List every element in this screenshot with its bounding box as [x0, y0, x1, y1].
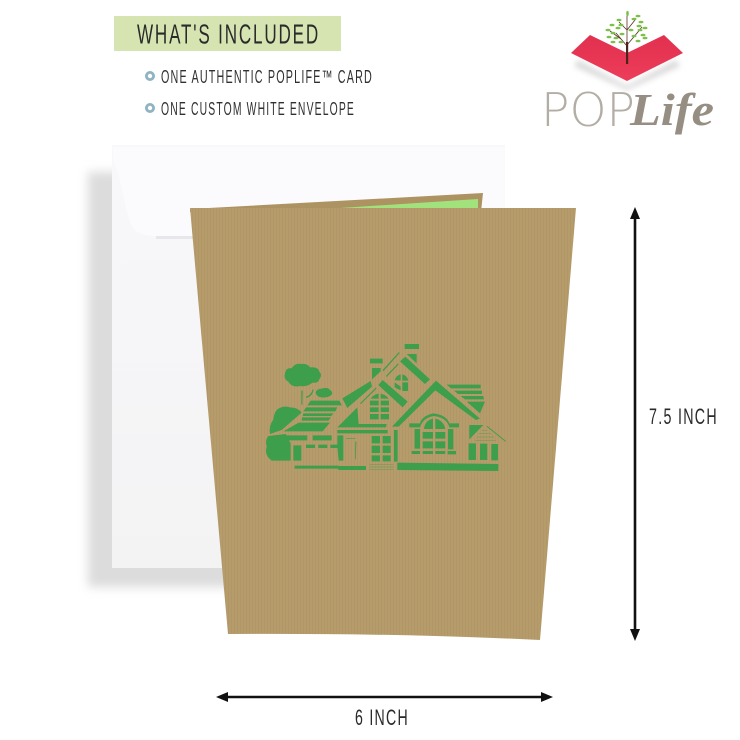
- porch post and foundation: [394, 430, 498, 471]
- logo shadow: [574, 60, 680, 90]
- left roof: [283, 401, 342, 431]
- dimension arrow: height: [630, 207, 640, 641]
- card front: [190, 208, 576, 640]
- envelope flap: [113, 147, 505, 236]
- logo wordmark: POP: POP: [541, 83, 635, 137]
- card green insert: [340, 199, 478, 209]
- chimneys: [370, 344, 419, 379]
- greeting card: [190, 193, 576, 640]
- logo wordmark: Life: Life: [629, 84, 714, 135]
- door: [346, 438, 356, 459]
- gable window: [370, 394, 389, 419]
- heading: what's included: [114, 16, 341, 51]
- item: card: ONE AUTHENTIC POPLIFE™ CARD: [161, 67, 373, 87]
- envelope shadow: [88, 172, 378, 587]
- list of included items: [146, 67, 373, 119]
- right roof stripes: [447, 385, 485, 413]
- house cut-out: [266, 344, 506, 471]
- tree and bush: [285, 364, 321, 386]
- attic window: [395, 374, 408, 391]
- arched window: [409, 413, 459, 427]
- porch roof: [337, 407, 388, 433]
- logo: red book: [571, 35, 683, 81]
- dimension label: width: 6 INCH: [355, 705, 409, 730]
- logo: tree: [606, 11, 648, 64]
- envelope body: [112, 145, 505, 568]
- roof bands: [342, 352, 430, 408]
- lower window: [372, 436, 391, 461]
- dimension arrow: width: [216, 692, 553, 702]
- heading: what's included: WHAT'S INCLUDED: [137, 18, 320, 50]
- main gable: [392, 381, 480, 427]
- envelope: [88, 145, 505, 587]
- item: card: [146, 67, 373, 87]
- item: envelope: [146, 99, 355, 119]
- small right gable: [469, 425, 506, 442]
- card back panel: [190, 193, 483, 212]
- logo: PopLife: [541, 11, 714, 137]
- item: envelope: ONE CUSTOM WHITE ENVELOPE: [161, 99, 355, 119]
